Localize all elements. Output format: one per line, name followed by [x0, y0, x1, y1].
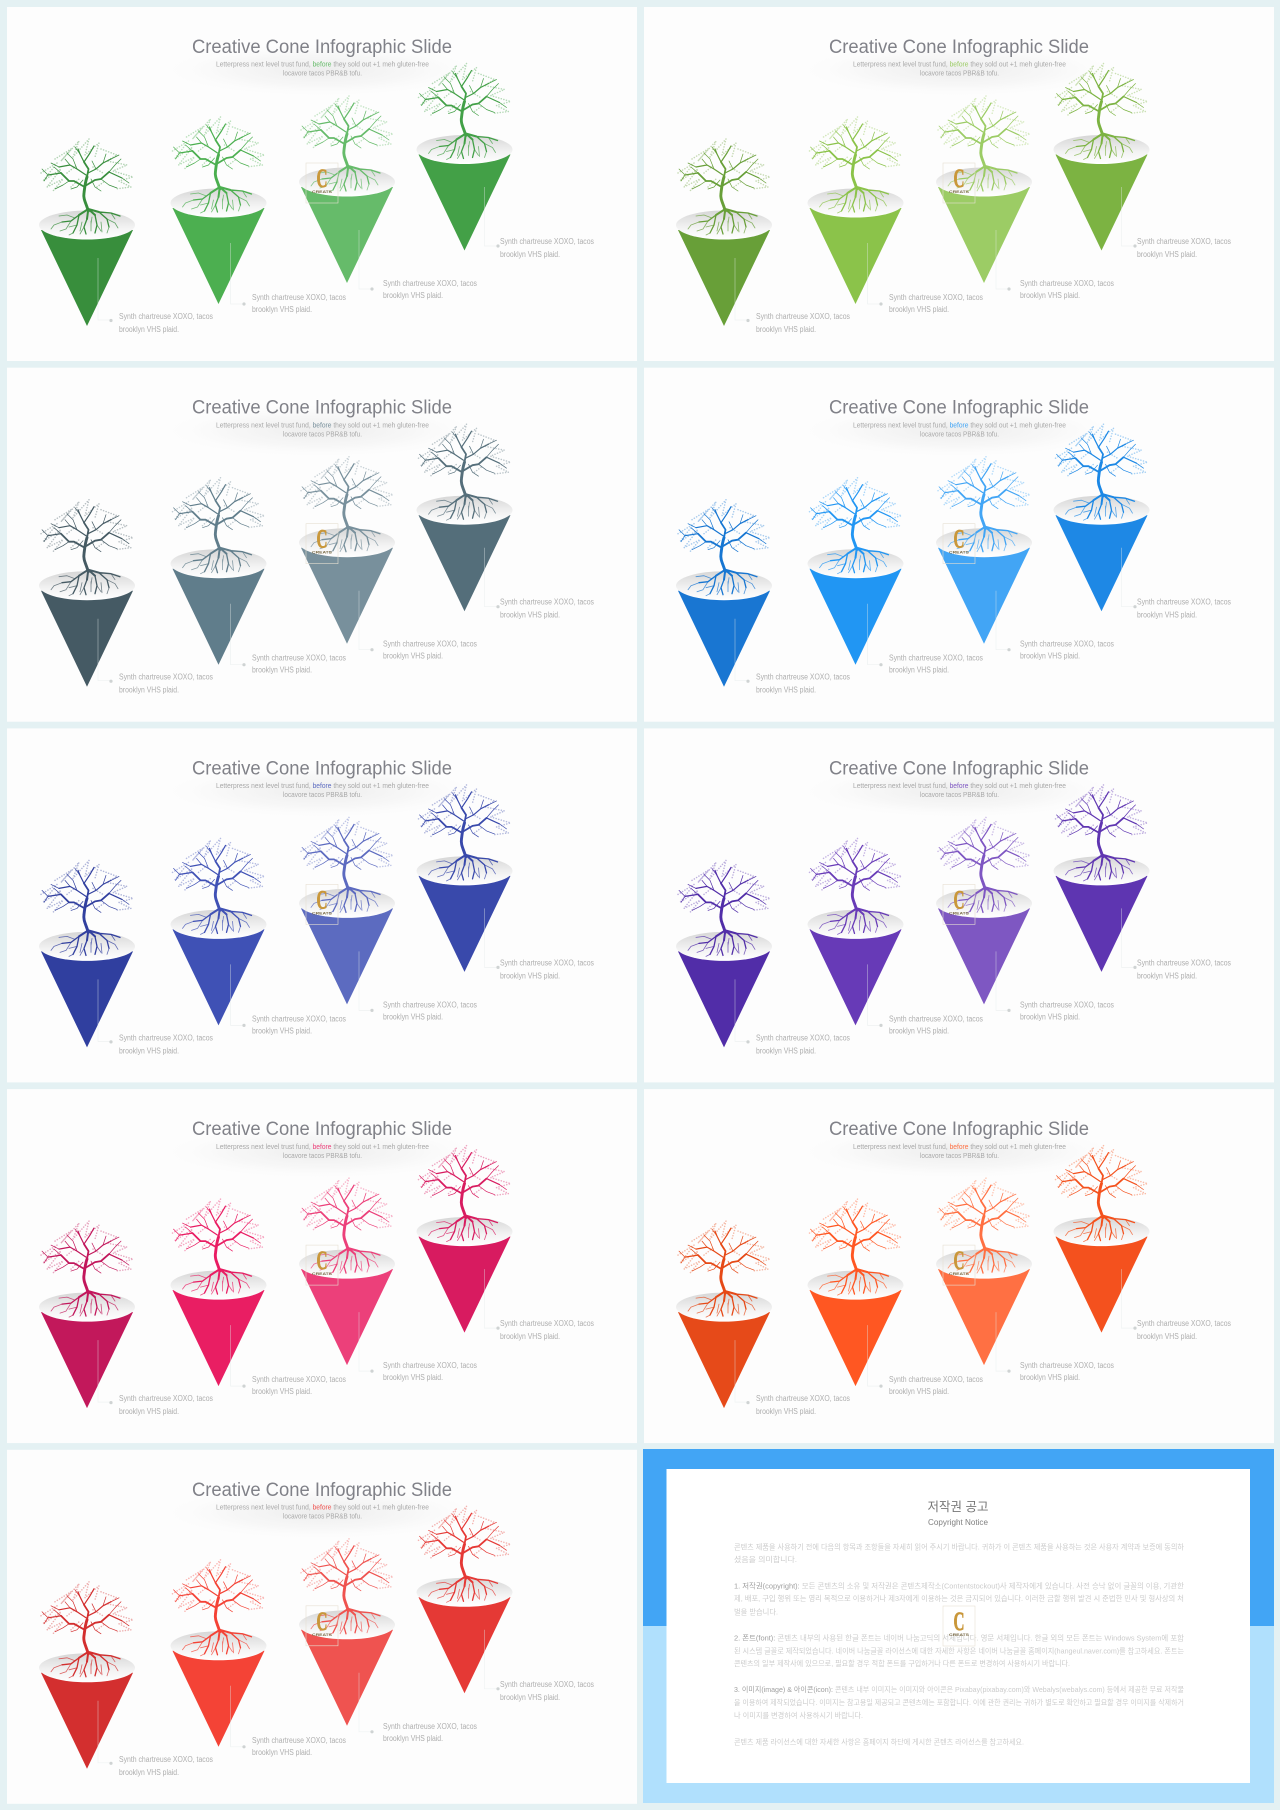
label 2: Synth chartreuse XOXO, tacos — [889, 293, 983, 302]
label 1 — [98, 258, 213, 334]
label 2 — [868, 964, 983, 1035]
cone 1 — [39, 1221, 135, 1408]
label 4 — [1122, 908, 1231, 980]
notice body: 벌을 받습니다. — [734, 1606, 778, 1616]
notice body: 콘텐츠 제품 라이선스에 대한 자세한 사항은 홈페이지 하단에 게시한 콘텐츠 라이선스를 참고하세요. — [734, 1736, 1024, 1746]
panel: red cones — [7, 1450, 637, 1804]
notice body: 나 이미지를 변경하여 사용하시기 바랍니다. — [734, 1710, 863, 1720]
notice body: 제, 배포, 구입 행위 또는 영리 목적으로 이용하거나 제3자에게 이용하는 것은 금지되어 있습니다. 이러한 금할 행위 발견 시 준법한 민사 및 형사상의 처 — [734, 1593, 1184, 1603]
subtitle: locavore tacos PBR&B tofu. — [920, 790, 999, 799]
watermark: C — [954, 1246, 964, 1275]
cone 3 — [299, 1539, 395, 1726]
cone 4 — [416, 1146, 512, 1333]
label 1: Synth chartreuse XOXO, tacos — [119, 1755, 213, 1764]
label 3 — [996, 1312, 1114, 1382]
label 4 — [484, 187, 594, 259]
title: Creative Cone Infographic Slide — [192, 1119, 452, 1140]
cone 1 — [676, 139, 772, 326]
label 3: brooklyn VHS plaid. — [1020, 291, 1080, 300]
watermark: CREATS — [949, 190, 970, 194]
title: Creative Cone Infographic Slide — [829, 1119, 1089, 1140]
cone 3 — [299, 96, 395, 283]
label 1: brooklyn VHS plaid. — [119, 1407, 179, 1416]
label 4: brooklyn VHS plaid. — [500, 1693, 560, 1702]
panel: green cones — [7, 7, 637, 361]
watermark: CREATS — [312, 1272, 333, 1276]
label 2: brooklyn VHS plaid. — [889, 666, 949, 675]
cone 1 — [676, 500, 772, 687]
label 1: Synth chartreuse XOXO, tacos — [756, 312, 850, 321]
label 1 — [98, 1701, 213, 1777]
subtitle: locavore tacos PBR&B tofu. — [283, 69, 362, 78]
label 1: brooklyn VHS plaid. — [119, 686, 179, 695]
label 4: brooklyn VHS plaid. — [1137, 250, 1197, 259]
subtitle — [853, 781, 1066, 799]
label 1 — [735, 619, 850, 695]
cone 2 — [170, 1560, 266, 1747]
label 2 — [868, 604, 983, 675]
cone 4 — [416, 64, 512, 250]
label 1: brooklyn VHS plaid. — [756, 1407, 816, 1416]
label 4: brooklyn VHS plaid. — [500, 250, 560, 259]
notice body: 콘텐츠 제품을 사용하기 전에 다음의 항목과 조항들을 자세히 읽어 주시기 바랍니다. 귀하가 이 콘텐츠 제품을 사용하는 것은 사용자 계약과 보증에 동의하 — [734, 1542, 1184, 1552]
label 2: brooklyn VHS plaid. — [252, 1387, 312, 1396]
cone 2 — [808, 117, 904, 304]
subtitle: locavore tacos PBR&B tofu. — [283, 790, 362, 799]
label 4: brooklyn VHS plaid. — [1137, 611, 1197, 620]
label 4: brooklyn VHS plaid. — [1137, 971, 1197, 980]
label 1 — [98, 979, 213, 1055]
watermark — [943, 1245, 975, 1285]
label 4: Synth chartreuse XOXO, tacos — [1137, 237, 1231, 246]
subtitle — [216, 420, 429, 438]
subtitle: Letterpress next level trust fund, before they sold out +1 meh gluten-free — [216, 781, 429, 790]
subtitle — [216, 1142, 429, 1160]
label 2 — [231, 1686, 346, 1757]
cone 3 — [299, 457, 395, 644]
cone 4 — [1054, 64, 1150, 250]
notice body: 된 시스템 글꼴로 제작되었습니다. 네이버 나눔글꼴 라이선스에 대한 자세한 사항은 네이버 나눔글꼴 홈페이지(hangeul.naver.com)를 참고하세요. 폰트는 — [734, 1646, 1184, 1656]
label 1: Synth chartreuse XOXO, tacos — [756, 1394, 850, 1403]
label 3: Synth chartreuse XOXO, tacos — [383, 640, 477, 649]
label 2: Synth chartreuse XOXO, tacos — [889, 1014, 983, 1023]
subtitle: Letterpress next level trust fund, before they sold out +1 meh gluten-free — [216, 1142, 429, 1151]
label 3: Synth chartreuse XOXO, tacos — [1020, 1361, 1114, 1370]
watermark: C — [316, 525, 328, 554]
cone 1 — [676, 860, 772, 1047]
label 3 — [359, 1673, 477, 1743]
title: Creative Cone Infographic Slide — [192, 758, 452, 779]
label 2: Synth chartreuse XOXO, tacos — [889, 1375, 983, 1384]
label 4: Synth chartreuse XOXO, tacos — [1137, 958, 1231, 967]
label 4 — [484, 908, 594, 980]
watermark — [943, 1606, 975, 1646]
label 2: Synth chartreuse XOXO, tacos — [889, 654, 983, 663]
cone 3 — [299, 817, 395, 1004]
label 1: brooklyn VHS plaid. — [756, 1046, 816, 1055]
label 3: Synth chartreuse XOXO, tacos — [383, 1722, 477, 1731]
cone 2 — [808, 1199, 904, 1386]
watermark: CREATS — [949, 551, 970, 555]
watermark: C — [954, 164, 964, 193]
label 1 — [735, 258, 850, 334]
subtitle: Letterpress next level trust fund, before they sold out +1 meh gluten-free — [216, 60, 429, 69]
subtitle — [216, 1502, 429, 1520]
subtitle: Letterpress next level trust fund, before they sold out +1 meh gluten-free — [853, 420, 1066, 429]
watermark: C — [954, 1607, 964, 1636]
label 4: Synth chartreuse XOXO, tacos — [1137, 1319, 1231, 1328]
label 4 — [484, 1269, 594, 1341]
watermark — [306, 163, 338, 203]
watermark: C — [954, 885, 964, 914]
label 3 — [996, 591, 1114, 661]
notice body: 셨음을 의미합니다. — [734, 1554, 797, 1564]
watermark: CREATS — [949, 1633, 970, 1637]
watermark: CREATS — [312, 911, 333, 915]
watermark — [943, 524, 975, 564]
watermark: CREATS — [312, 1633, 333, 1637]
watermark — [943, 884, 975, 924]
label 1: Synth chartreuse XOXO, tacos — [756, 1033, 850, 1042]
panel: blue cones — [644, 368, 1274, 722]
panel: light green cones — [644, 7, 1274, 361]
label 4: brooklyn VHS plaid. — [500, 1332, 560, 1341]
label 3: Synth chartreuse XOXO, tacos — [1020, 1000, 1114, 1009]
panel: copyright notice — [643, 1449, 1274, 1803]
label 3 — [996, 230, 1114, 300]
label 3: brooklyn VHS plaid. — [383, 1012, 443, 1021]
label 2: Synth chartreuse XOXO, tacos — [252, 1736, 346, 1745]
label 3 — [996, 951, 1114, 1021]
panel: deep orange cones — [644, 1089, 1274, 1443]
watermark: C — [316, 885, 328, 914]
cone 2 — [170, 478, 266, 665]
label 2: Synth chartreuse XOXO, tacos — [252, 654, 346, 663]
label 4 — [484, 548, 594, 620]
subtitle: Letterpress next level trust fund, before they sold out +1 meh gluten-free — [216, 420, 429, 429]
cone 3 — [936, 1178, 1032, 1365]
label 4 — [1122, 548, 1231, 620]
label 1: Synth chartreuse XOXO, tacos — [756, 673, 850, 682]
subtitle: locavore tacos PBR&B tofu. — [920, 429, 999, 438]
watermark — [306, 884, 338, 924]
subtitle: Letterpress next level trust fund, before they sold out +1 meh gluten-free — [853, 781, 1066, 790]
cone 2 — [808, 478, 904, 665]
subtitle: locavore tacos PBR&B tofu. — [283, 1512, 362, 1521]
label 2: brooklyn VHS plaid. — [889, 305, 949, 314]
cone 4 — [416, 424, 512, 611]
subtitle: Letterpress next level trust fund, before they sold out +1 meh gluten-free — [853, 60, 1066, 69]
subtitle — [216, 60, 429, 78]
label 2: brooklyn VHS plaid. — [252, 666, 312, 675]
notice title: 저작권 공고 — [928, 1500, 988, 1514]
label 1: Synth chartreuse XOXO, tacos — [119, 312, 213, 321]
subtitle: locavore tacos PBR&B tofu. — [920, 1151, 999, 1160]
cone 4 — [416, 1506, 512, 1693]
cone 2 — [808, 838, 904, 1025]
title: Creative Cone Infographic Slide — [829, 398, 1089, 419]
cone 3 — [936, 96, 1032, 283]
label 1: brooklyn VHS plaid. — [119, 1768, 179, 1777]
label 1 — [98, 619, 213, 695]
watermark: CREATS — [949, 1272, 970, 1276]
title: Creative Cone Infographic Slide — [192, 37, 452, 58]
label 3: brooklyn VHS plaid. — [383, 652, 443, 661]
watermark: CREATS — [949, 911, 970, 915]
title: Creative Cone Infographic Slide — [192, 1480, 452, 1501]
watermark: C — [316, 1607, 328, 1636]
label 3: brooklyn VHS plaid. — [1020, 652, 1080, 661]
label 4 — [1122, 187, 1231, 259]
cone 3 — [299, 1178, 395, 1365]
notice body: 1. 저작권(copyright): 모든 콘텐츠의 소유 및 저작권은 콘텐츠제작소(Contentstockout)사 제작자에게 있습니다. 사전 승낙 없이 글꼴의 이용, 기관한 — [734, 1580, 1184, 1590]
label 3: Synth chartreuse XOXO, tacos — [383, 1361, 477, 1370]
watermark: C — [954, 525, 964, 554]
subtitle — [853, 420, 1066, 438]
label 4 — [484, 1630, 594, 1702]
label 2 — [868, 1325, 983, 1396]
watermark — [306, 1245, 338, 1285]
cone 1 — [39, 139, 135, 326]
subtitle — [216, 781, 429, 799]
label 2 — [868, 243, 983, 314]
label 2: Synth chartreuse XOXO, tacos — [252, 293, 346, 302]
label 2 — [231, 1325, 346, 1396]
panel: pink cones — [7, 1089, 637, 1443]
watermark — [943, 163, 975, 203]
label 2 — [231, 964, 346, 1035]
cone 4 — [1054, 424, 1150, 611]
label 4: Synth chartreuse XOXO, tacos — [500, 1319, 594, 1328]
watermark: CREATS — [312, 190, 333, 194]
notice body: 콘텐츠의 일부 제작사에 있으므로, 필요할 경우 적합 폰트를 구입하거나 다른 폰트로 변경하여 사용하시기 바랍니다. — [734, 1658, 1070, 1668]
cone 4 — [1054, 785, 1150, 972]
label 4 — [1122, 1269, 1231, 1341]
cone 3 — [936, 457, 1032, 644]
panel: indigo cones — [7, 728, 637, 1082]
label 4: Synth chartreuse XOXO, tacos — [500, 1680, 594, 1689]
cone 2 — [170, 838, 266, 1025]
panel: blue-grey cones — [7, 368, 637, 722]
label 4: Synth chartreuse XOXO, tacos — [500, 598, 594, 607]
cone 1 — [39, 500, 135, 687]
label 1: brooklyn VHS plaid. — [756, 686, 816, 695]
label 2: Synth chartreuse XOXO, tacos — [252, 1375, 346, 1384]
label 1 — [98, 1340, 213, 1416]
label 2: brooklyn VHS plaid. — [252, 1026, 312, 1035]
label 2 — [231, 604, 346, 675]
notice body: 을 이용하여 제작되었습니다. 이미지는 참고용일 제공되고 콘텐츠에는 포함합니다. 이에 관한 권리는 귀하가 별도로 확인하고 필요할 경우 이미지를 삭제하거 — [734, 1697, 1184, 1707]
label 3: brooklyn VHS plaid. — [383, 1373, 443, 1382]
label 4: Synth chartreuse XOXO, tacos — [1137, 598, 1231, 607]
watermark — [306, 524, 338, 564]
notice subtitle: Copyright Notice — [928, 1517, 988, 1527]
subtitle: Letterpress next level trust fund, before they sold out +1 meh gluten-free — [853, 1142, 1066, 1151]
label 3: brooklyn VHS plaid. — [383, 291, 443, 300]
label 1: Synth chartreuse XOXO, tacos — [119, 1033, 213, 1042]
label 1: Synth chartreuse XOXO, tacos — [119, 673, 213, 682]
cone 2 — [170, 1199, 266, 1386]
label 3: Synth chartreuse XOXO, tacos — [1020, 279, 1114, 288]
cone 1 — [39, 1582, 135, 1769]
label 3: Synth chartreuse XOXO, tacos — [1020, 640, 1114, 649]
watermark — [306, 1606, 338, 1646]
watermark: C — [316, 1246, 328, 1275]
notice body: 3. 이미지(image) & 아이콘(icon): 콘텐츠 내부 이미지는 이미지와 아이콘은 Pixabay(pixabay.com)와 Webalys(webalys.com) 등에서 제공한 무료 저작물 — [734, 1684, 1184, 1694]
subtitle — [853, 60, 1066, 78]
label 3 — [359, 230, 477, 300]
cone 2 — [170, 117, 266, 304]
label 2: brooklyn VHS plaid. — [252, 1748, 312, 1757]
label 1: brooklyn VHS plaid. — [756, 325, 816, 334]
subtitle: locavore tacos PBR&B tofu. — [283, 1151, 362, 1160]
label 4: Synth chartreuse XOXO, tacos — [500, 958, 594, 967]
watermark: C — [316, 164, 328, 193]
label 3: Synth chartreuse XOXO, tacos — [383, 1000, 477, 1009]
label 1: Synth chartreuse XOXO, tacos — [119, 1394, 213, 1403]
label 3: brooklyn VHS plaid. — [1020, 1012, 1080, 1021]
label 1: brooklyn VHS plaid. — [119, 1046, 179, 1055]
label 3 — [359, 951, 477, 1021]
label 3 — [359, 591, 477, 661]
subtitle: locavore tacos PBR&B tofu. — [920, 69, 999, 78]
cone 1 — [676, 1221, 772, 1408]
title: Creative Cone Infographic Slide — [829, 37, 1089, 58]
title: Creative Cone Infographic Slide — [192, 398, 452, 419]
title: Creative Cone Infographic Slide — [829, 758, 1089, 779]
subtitle: Letterpress next level trust fund, before they sold out +1 meh gluten-free — [216, 1503, 429, 1512]
label 4: brooklyn VHS plaid. — [500, 971, 560, 980]
watermark: CREATS — [312, 551, 333, 555]
label 2: brooklyn VHS plaid. — [889, 1026, 949, 1035]
notice body — [734, 1542, 1184, 1746]
cone 4 — [1054, 1146, 1150, 1333]
label 1: brooklyn VHS plaid. — [119, 325, 179, 334]
panel: deep purple cones — [644, 728, 1274, 1082]
notice body: 2. 폰트(font): 콘텐츠 내부의 사용된 한글 폰트는 네이버 나눔고딕의 서체입니다. 영문 서체입니다. 한글 외의 모든 폰트는 Windows System에 포함 — [734, 1632, 1184, 1642]
subtitle: locavore tacos PBR&B tofu. — [283, 429, 362, 438]
label 3: brooklyn VHS plaid. — [383, 1734, 443, 1743]
label 3 — [359, 1312, 477, 1382]
label 2: brooklyn VHS plaid. — [889, 1387, 949, 1396]
label 2: Synth chartreuse XOXO, tacos — [252, 1014, 346, 1023]
label 2 — [231, 243, 346, 314]
cone 3 — [936, 817, 1032, 1004]
label 1 — [735, 1340, 850, 1416]
label 4: Synth chartreuse XOXO, tacos — [500, 237, 594, 246]
cone 1 — [39, 860, 135, 1047]
cone 4 — [416, 785, 512, 972]
label 4: brooklyn VHS plaid. — [500, 611, 560, 620]
label 4: brooklyn VHS plaid. — [1137, 1332, 1197, 1341]
label 1 — [735, 979, 850, 1055]
subtitle — [853, 1142, 1066, 1160]
label 2: brooklyn VHS plaid. — [252, 305, 312, 314]
label 3: Synth chartreuse XOXO, tacos — [383, 279, 477, 288]
label 3: brooklyn VHS plaid. — [1020, 1373, 1080, 1382]
